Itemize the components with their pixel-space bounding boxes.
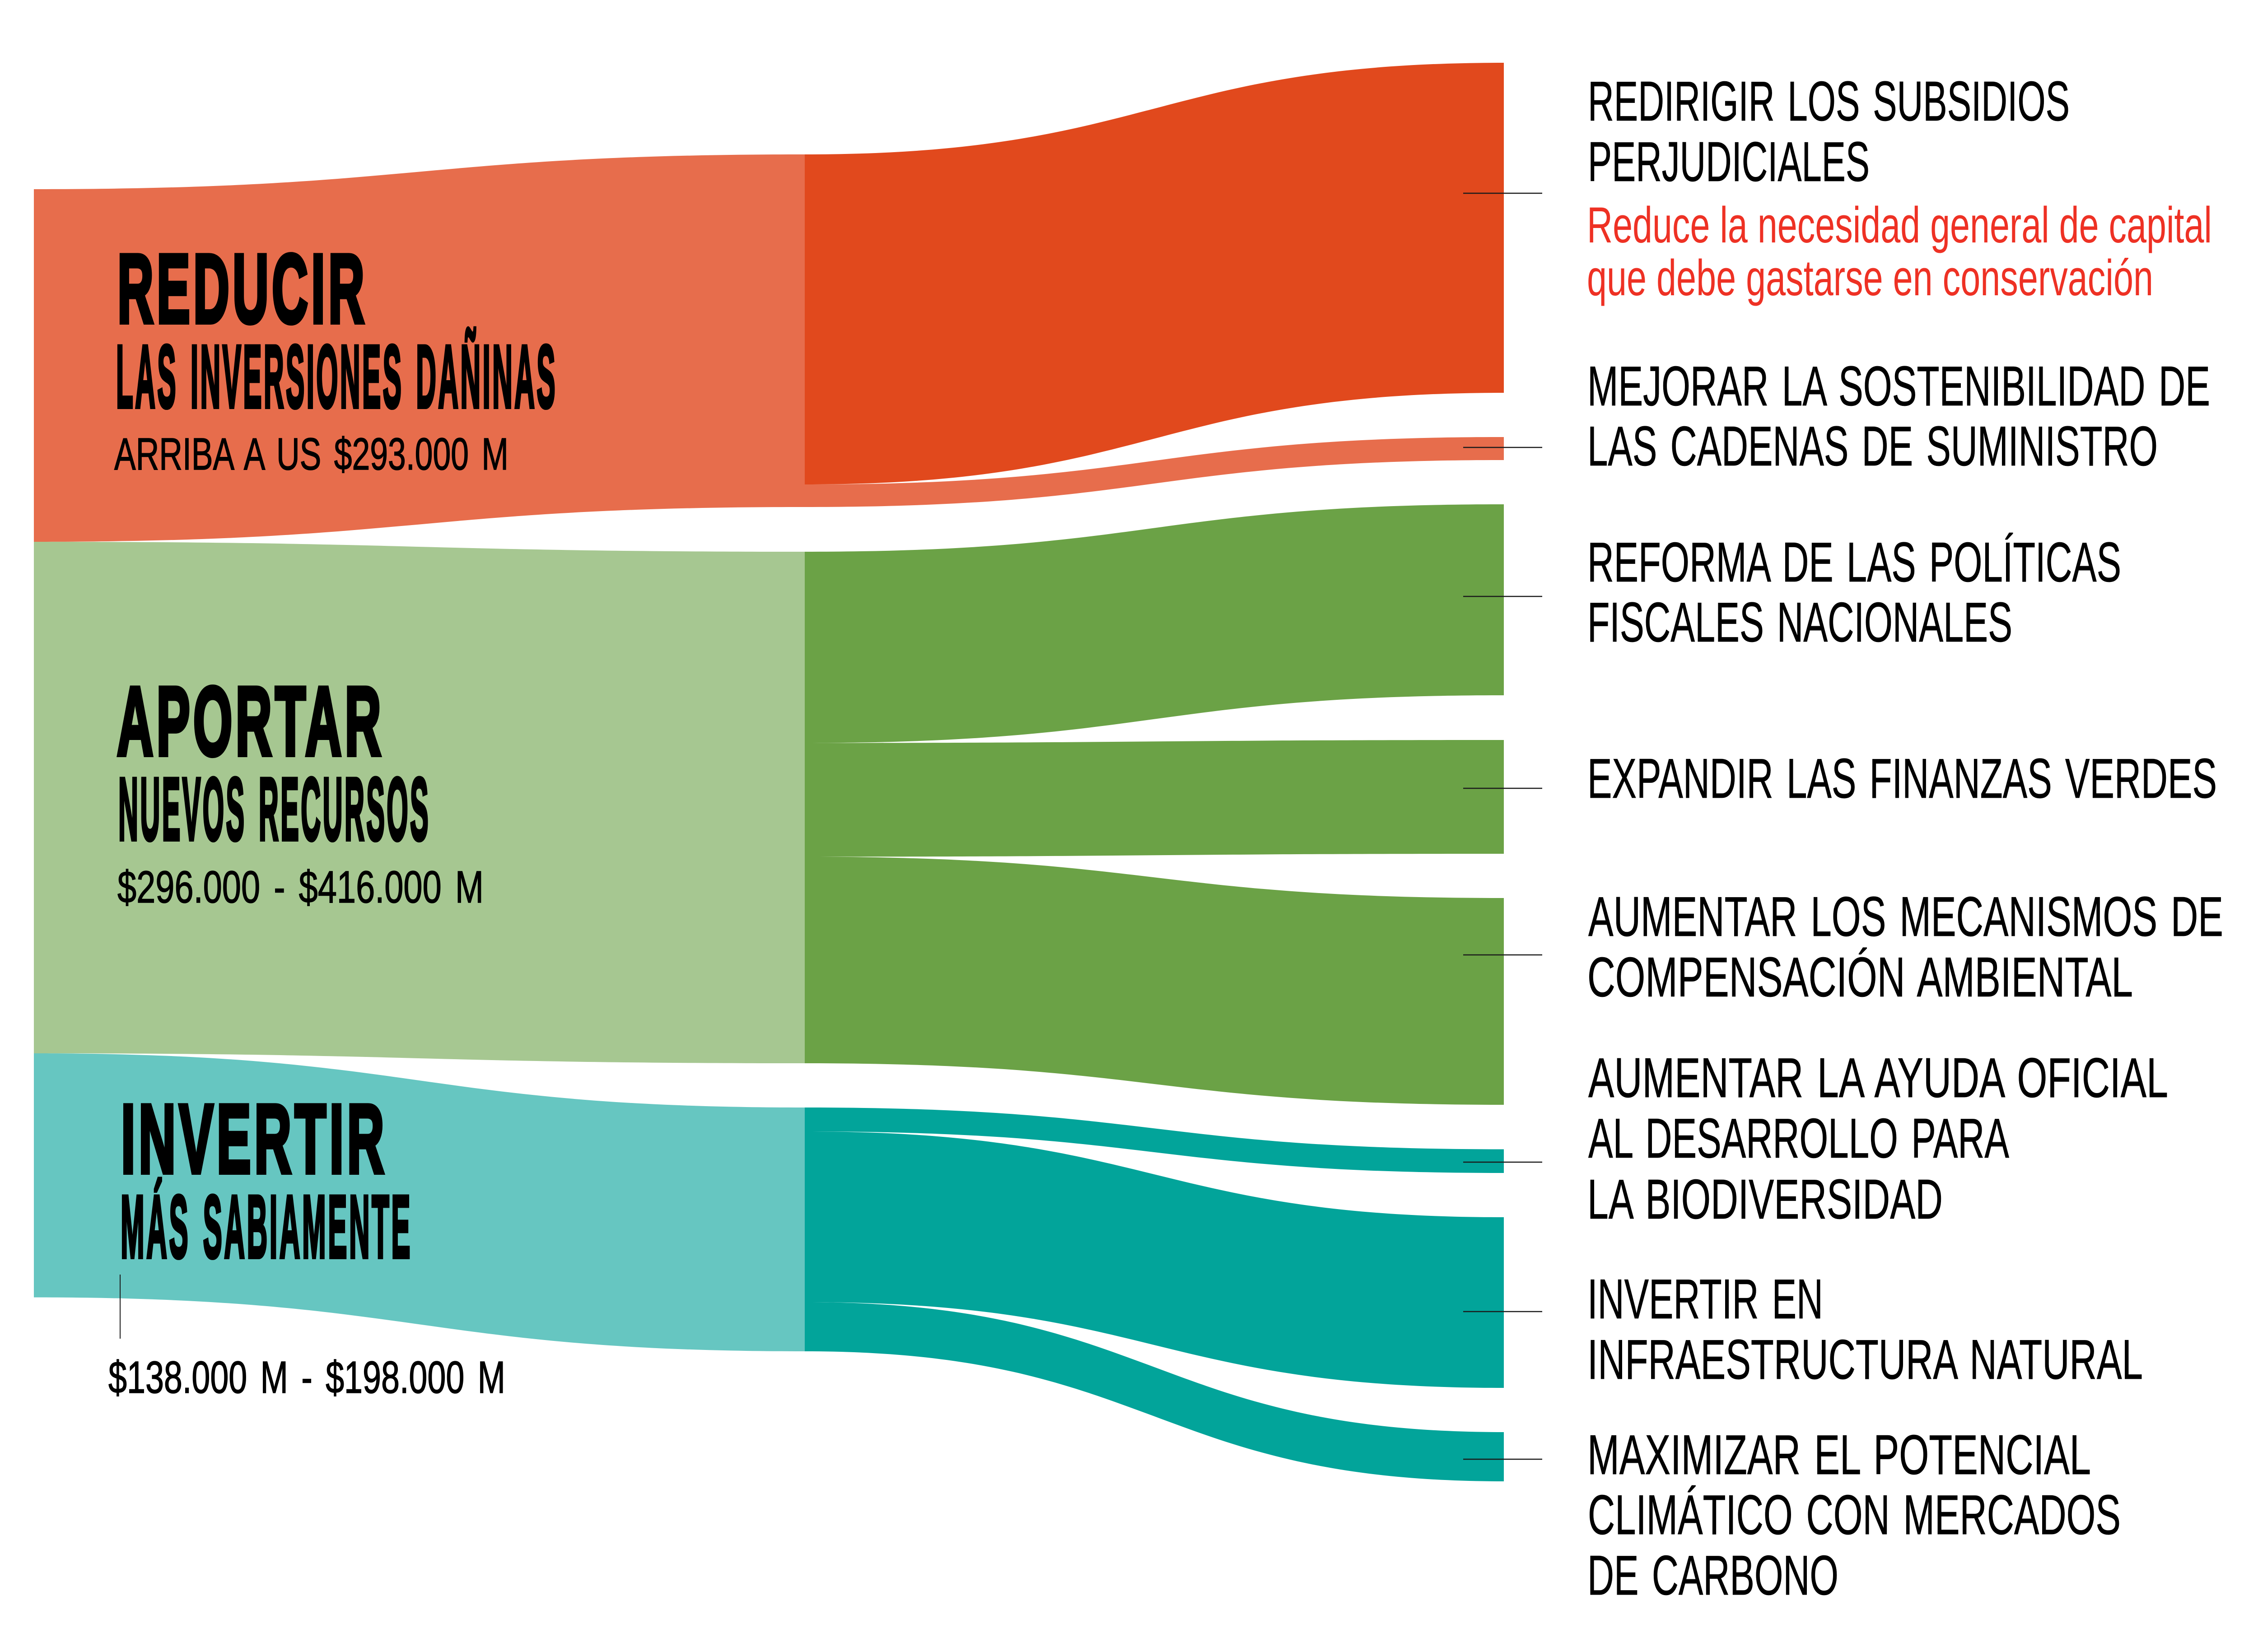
label: redirigir los subsidios	[1588, 70, 2070, 193]
flow: compensación ambiental	[805, 857, 1504, 1105]
heading block: reducir: REDUCIR	[117, 234, 368, 343]
text: NUEVOS RECURSOS	[118, 759, 430, 859]
band: invertir	[34, 1053, 805, 1351]
flow: redirigir los subsidios	[805, 63, 1504, 484]
label: mercados de carbono: DE CARBONO	[1587, 1545, 1838, 1607]
label: ayuda oficial: LA BIODIVERSIDAD	[1587, 1168, 1943, 1231]
note: necesidad de capital	[1587, 197, 2212, 306]
heading block: aportar: $296.000 - $416.000 M	[117, 862, 484, 912]
label: compensación ambiental	[1587, 886, 2223, 1009]
label: redirigir los subsidios: PERJUDICIALES	[1588, 131, 1870, 193]
flow: finanzas verdes	[805, 740, 1504, 857]
label: ayuda oficial	[1587, 1047, 2168, 1231]
flow: ayuda oficial	[805, 1108, 1504, 1173]
label: ayuda oficial: AL DESARROLLO PARA	[1588, 1108, 2009, 1170]
label: políticas fiscales	[1587, 531, 2121, 654]
flow: políticas fiscales	[805, 504, 1504, 743]
heading block: aportar: APORTAR	[117, 666, 384, 776]
label: infraestructura natural	[1587, 1268, 2143, 1391]
amount: invertir: $138.000 M - $198.000 M	[108, 1352, 505, 1403]
flow: infraestructura natural	[805, 1131, 1504, 1388]
heading block: invertir: INVERTIR	[121, 1084, 387, 1193]
label: infraestructura natural: INVERTIR EN	[1587, 1268, 1823, 1331]
text: MÁS SABIAMENTE	[121, 1177, 412, 1276]
band: reducir	[34, 154, 805, 542]
label: mercados de carbono	[1587, 1424, 2121, 1607]
text: LAS INVERSIONES DAÑINAS	[116, 327, 557, 426]
flow: mercados de carbono	[805, 1302, 1504, 1481]
heading block: invertir	[121, 1084, 412, 1276]
label: políticas fiscales: FISCALES NACIONALES	[1587, 591, 2012, 654]
heading block: reducir	[114, 234, 557, 479]
label: cadenas de suministro	[1587, 355, 2210, 478]
heading block: aportar	[117, 666, 484, 912]
band: aportar	[34, 542, 805, 1063]
flow: cadenas de suministro	[805, 437, 1504, 507]
heading block: reducir: ARRIBA A US $293.000 M	[114, 429, 509, 479]
leader lines	[120, 193, 1542, 1459]
